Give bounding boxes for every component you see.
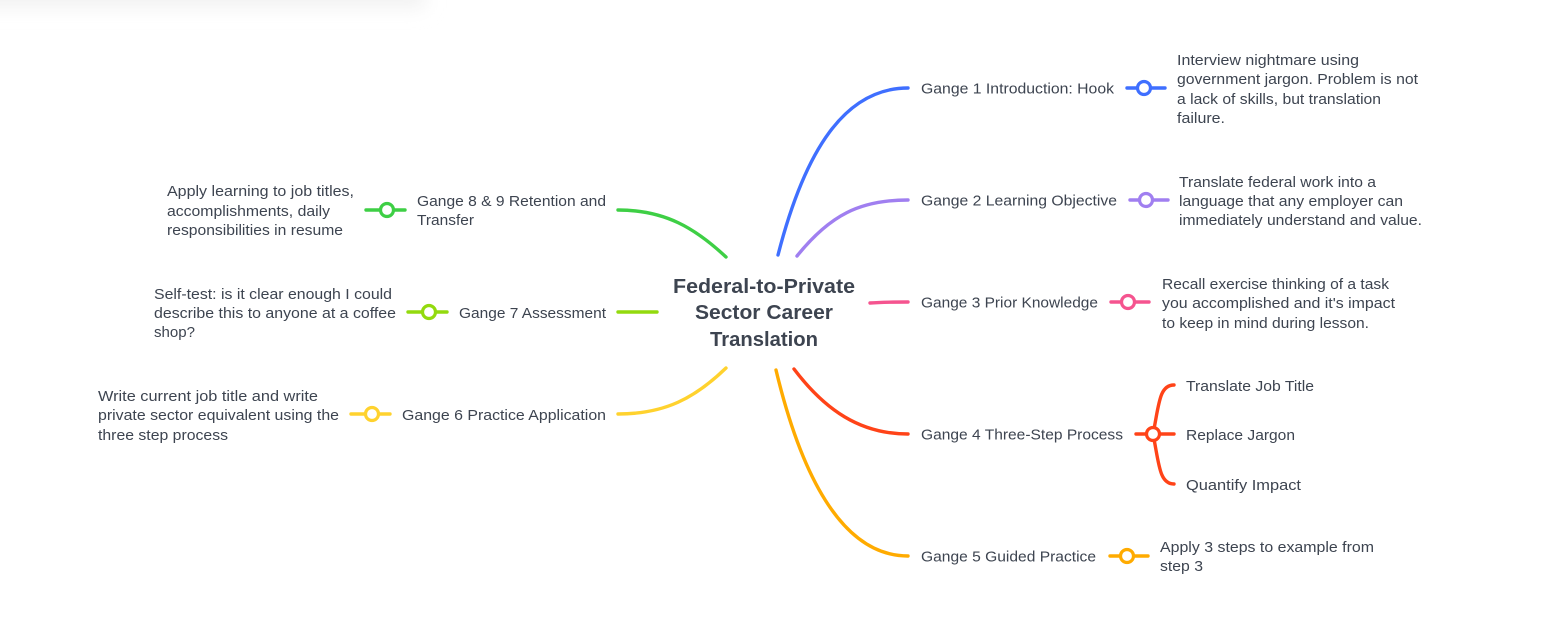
detail text: hook: failure. bbox=[1177, 110, 1225, 127]
connector: yellow curve bbox=[618, 368, 726, 414]
detail text: self-test bbox=[154, 286, 396, 341]
detail text: objective: Translate federal work into a bbox=[1179, 174, 1377, 191]
connector: orange curve bbox=[776, 370, 908, 556]
label: Gange 3: Gange 3 Prior Knowledge bbox=[921, 294, 1098, 312]
branch: Gange 5 Guided Practice bbox=[776, 370, 1374, 575]
label: Gange 1: Gange 1 Introduction: Hook bbox=[921, 80, 1115, 98]
label: Gange 8 & 9: Transfer bbox=[417, 212, 474, 229]
detail text: recall: Recall exercise thinking of a task bbox=[1162, 276, 1390, 293]
node: yellow bbox=[351, 408, 390, 420]
detail text: apply steps: step 3 bbox=[1160, 558, 1203, 575]
central topic: Translation bbox=[710, 329, 818, 351]
branch: Gange 8 & 9 Retention and Transfer bbox=[167, 183, 726, 257]
detail text: self-test: shop? bbox=[154, 324, 195, 341]
detail text: recall bbox=[1162, 276, 1396, 332]
branch: Gange 7 Assessment bbox=[154, 286, 657, 341]
connector: green curve bbox=[618, 210, 726, 257]
connector: pink curve bbox=[870, 302, 908, 303]
node: blue bbox=[1127, 82, 1165, 94]
connector: lime line bbox=[618, 310, 657, 314]
detail text: hook: a lack of skills, but translation bbox=[1177, 91, 1381, 108]
detail text: recall: you accomplished and it's impact bbox=[1162, 295, 1396, 312]
step: Quantify Impact: Quantify Impact bbox=[1186, 477, 1302, 494]
detail text: practice: Write current job title and write bbox=[98, 388, 318, 405]
label: Gange 8 & 9 bbox=[417, 193, 606, 229]
node: lime bbox=[408, 306, 447, 318]
node: pink bbox=[1111, 296, 1149, 308]
label: Gange 5: Gange 5 Guided Practice bbox=[921, 548, 1096, 566]
detail text: apply steps bbox=[1160, 539, 1374, 575]
detail text: hook bbox=[1177, 52, 1419, 127]
step: Translate Job Title: Translate Job Title bbox=[1186, 378, 1314, 395]
detail text: practice: three step process bbox=[98, 427, 228, 444]
detail text: objective: immediately understand and value. bbox=[1179, 212, 1422, 229]
detail text: practice bbox=[98, 388, 339, 444]
detail text: apply learning: accomplishments, daily bbox=[167, 203, 331, 220]
branch: Gange 1 Introduction bbox=[778, 52, 1419, 255]
step: Replace Jargon: Replace Jargon bbox=[1186, 427, 1295, 444]
branch: Gange 2 Learning Objective bbox=[797, 174, 1422, 256]
label: Gange 2: Gange 2 Learning Objective bbox=[921, 192, 1117, 210]
label: Gange 7: Gange 7 Assessment bbox=[459, 305, 607, 322]
detail text: apply learning: responsibilities in resume bbox=[167, 222, 343, 239]
connector: purple curve bbox=[797, 200, 908, 256]
detail text: hook: government jargon. Problem is not bbox=[1177, 71, 1419, 88]
detail text: apply steps: Apply 3 steps to example from bbox=[1160, 539, 1374, 556]
sub-branches: three steps bbox=[1136, 385, 1174, 484]
node: green bbox=[366, 204, 405, 216]
detail text: recall: to keep in mind during lesson. bbox=[1162, 315, 1369, 332]
detail text: apply learning: Apply learning to job titles, bbox=[167, 183, 354, 200]
branch: Gange 4 Three-Step Process bbox=[794, 369, 1314, 494]
detail text: objective bbox=[1179, 174, 1422, 229]
detail text: objective: language that any employer can bbox=[1179, 193, 1403, 210]
detail text: practice: private sector equivalent using the bbox=[98, 407, 339, 424]
connector: red curve bbox=[794, 369, 908, 434]
label: Gange 8 & 9: Gange 8 & 9 Retention and bbox=[417, 193, 606, 210]
central topic: Sector Career bbox=[695, 302, 833, 324]
node: purple bbox=[1130, 194, 1168, 206]
connector: blue curve bbox=[778, 88, 908, 255]
central topic bbox=[673, 276, 855, 351]
detail text: self-test: Self-test: is it clear enough I could bbox=[154, 286, 392, 303]
detail text: apply learning bbox=[167, 183, 354, 239]
detail text: self-test: describe this to anyone at a coffee bbox=[154, 305, 396, 322]
central topic: Federal-to-Private bbox=[673, 276, 855, 298]
label: Gange 6: Gange 6 Practice Application bbox=[402, 407, 606, 424]
label: Gange 4: Gange 4 Three-Step Process bbox=[921, 426, 1123, 444]
branch: Gange 6 Practice Application bbox=[98, 368, 726, 444]
node: orange bbox=[1110, 550, 1148, 562]
branch: Gange 3 Prior Knowledge bbox=[870, 276, 1396, 332]
detail text: hook: Interview nightmare using bbox=[1177, 52, 1359, 69]
